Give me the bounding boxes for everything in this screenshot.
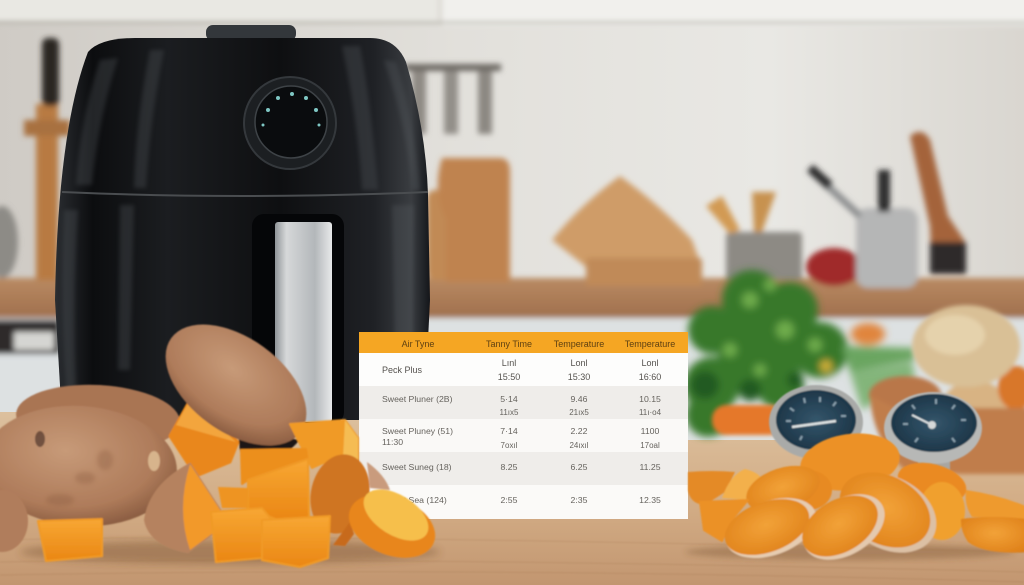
dark gap behind pile [238,430,300,452]
fryer dial [244,77,336,169]
cutting boards [427,190,457,280]
cut potato wedge [145,464,228,552]
carrot [712,405,784,435]
table row 3: 1100 [641,426,660,436]
table row 5: Sweet Sea (124) [382,495,447,505]
table header row: Tanny Time [486,339,532,349]
table row 4: 6.25 [571,462,588,472]
fryer steel handle [275,222,332,422]
table row 5: 2:55 [501,495,518,505]
fryer handle recess [252,214,344,424]
front slices [718,487,824,569]
shadow under pile [20,540,440,564]
roasted sweet potato slices right [685,427,1024,573]
table row 1: 15:50 [498,372,520,382]
table row 1: Peck Plus [382,365,423,375]
table row 4: Sweet Suneg (18) [382,462,452,472]
background wall [0,0,1024,300]
fryer body [55,38,430,420]
table row 3: 17oal [640,441,660,450]
table row 4 [359,452,688,485]
gauge left [769,385,863,459]
upper cabinets [0,0,1024,26]
table row 2: 10.15 [639,394,661,404]
air fryer [55,25,430,424]
table row 1 [359,353,688,386]
right edge slices [966,490,1024,519]
background kitchen counter and utensils [0,38,1024,442]
utensil crock [726,232,802,280]
table row 5: 12.35 [639,495,661,505]
table row 2 [359,386,688,419]
small left potato [0,490,28,552]
table row 3 [359,419,688,452]
bowl with potatoes [869,305,1024,474]
table header row [359,332,688,353]
cube center right [262,516,330,567]
table header row: Temperature [554,339,604,349]
utensil: left handle [36,104,58,280]
table row 2: 11ıx5 [500,408,519,417]
gauge right [884,392,982,472]
large front potato [0,399,181,533]
kettle [856,208,918,288]
front slice wedge [339,482,445,570]
table header row: Temperature [625,339,675,349]
table row 1: Lonl [641,358,659,368]
table row 5 [359,485,688,519]
round slice [303,449,377,539]
cube back left [170,400,238,476]
table row 1: Lonl [570,358,588,368]
cube center [211,508,272,562]
sweet potatoes pile left [0,300,445,570]
left edge slices [688,471,735,505]
back slices [784,470,832,510]
table row 1: 16:60 [639,372,661,382]
table row 3: 7·14 [500,426,518,436]
table row 2: Sweet Pluner (2B) [382,394,453,404]
blurred greens and vegetables [684,270,915,437]
table row 2: 9.46 [571,394,588,404]
table row 2: 5·14 [500,394,518,404]
back potato [14,381,182,455]
table header row: Air Tyne [402,339,434,349]
top potato [144,300,328,470]
table row 3: Sweet Pluney (51) [382,426,453,436]
table row 1: Lınl [502,358,516,368]
cube front left [38,519,102,561]
fryer reflections [62,46,420,395]
wooden table [0,412,1024,585]
spatula [910,132,966,274]
table row 3: 2.22 [571,426,588,436]
cooking chart table [359,332,688,519]
table row 3: 11:30 [382,437,403,447]
table row 5: 2:35 [571,495,588,505]
table row 2: 21ıx5 [569,408,589,417]
large slice [828,458,950,568]
table background [359,332,688,519]
fryer lid knob [206,25,296,41]
table row 1: 15:30 [568,372,590,382]
gauges [769,385,982,472]
orange cubes [290,420,358,468]
table row 4: 8.25 [501,462,518,472]
top large slice [797,427,903,497]
hanging tools [412,68,426,134]
table row 4: 11.25 [639,462,661,472]
table row 3: 7oxıl [501,441,518,450]
table row 3: 24ıxıl [569,441,589,450]
table row 2: 11ı·o4 [639,408,662,417]
